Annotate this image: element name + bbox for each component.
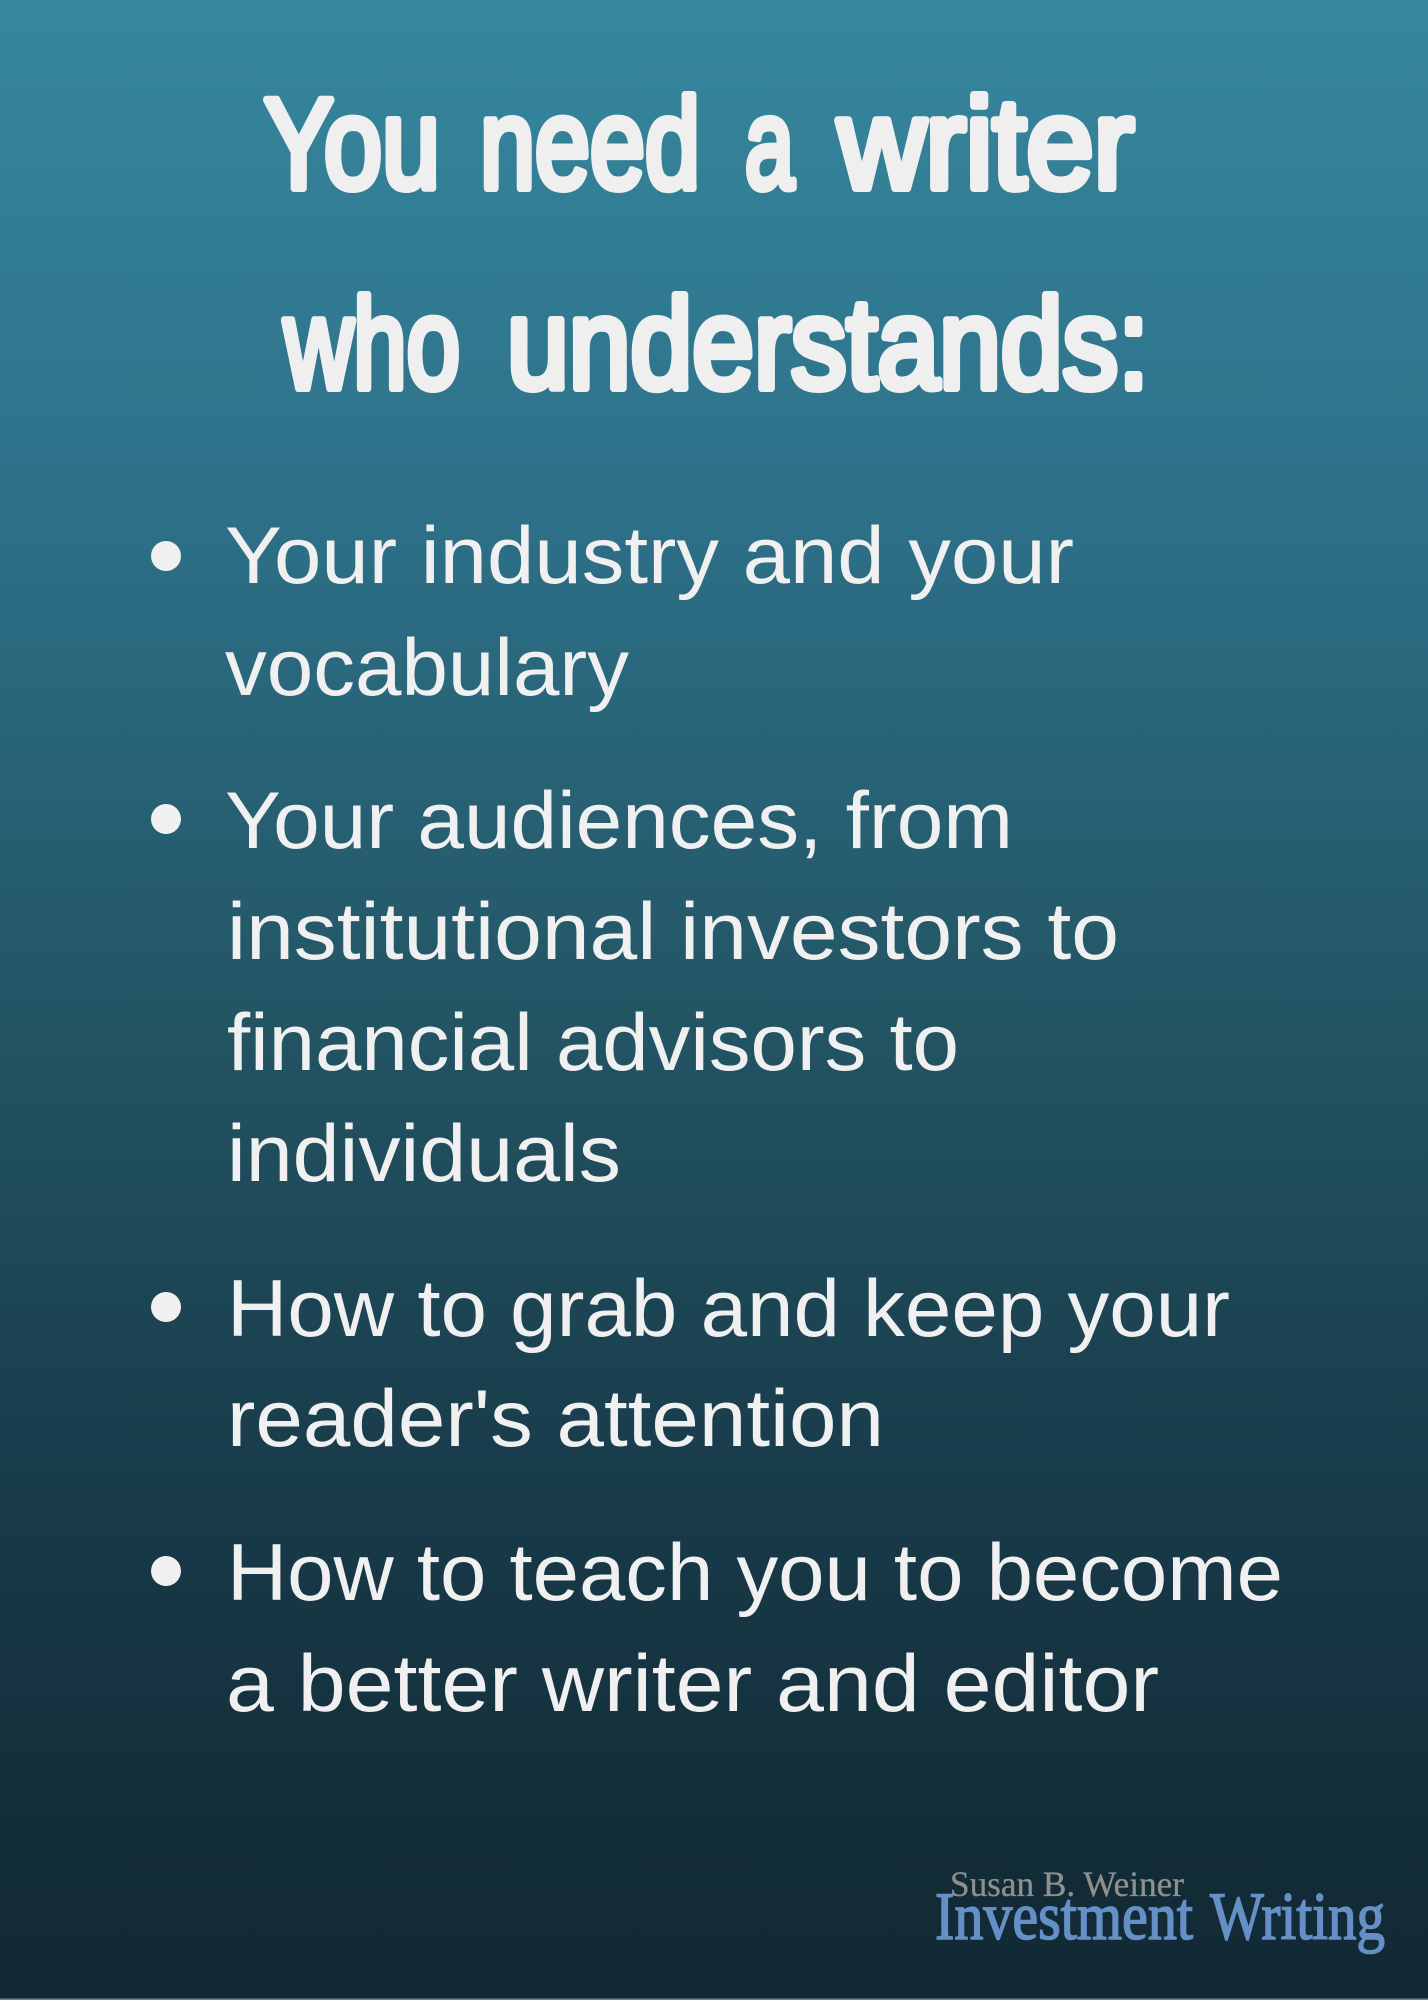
list item: attention: reader's attention <box>227 1374 884 1464</box>
title: understands: <box>507 273 1149 416</box>
list item: industry: vocabulary <box>225 623 630 713</box>
list item: audiences: individuals <box>227 1109 621 1199</box>
logo: Susan B. Weiner Investment Writing: Writing <box>1210 1878 1385 1954</box>
bottom edge line <box>0 1998 1428 2000</box>
title: a <box>745 73 795 216</box>
logo: Susan B. Weiner Investment Writing: Investment <box>935 1878 1193 1954</box>
logo: Susan B. Weiner Investment Writing: Susan B. Weiner <box>950 1864 1184 1904</box>
list item: audiences <box>151 776 1119 1199</box>
logo: Susan B. Weiner Investment Writing <box>935 1864 1385 1954</box>
list item: teaching: How to teach you to become <box>227 1528 1283 1618</box>
list item: audiences: institutional investors to <box>227 887 1119 977</box>
list item: teaching <box>151 1528 1283 1729</box>
list item: industry: Your industry and your <box>225 511 1074 601</box>
title: who <box>283 273 460 416</box>
title <box>264 73 1149 416</box>
bullet list <box>151 511 1283 1729</box>
title: writer <box>837 73 1134 216</box>
list item: audiences: financial advisors to <box>227 998 959 1088</box>
list item: attention: How to grab and keep your <box>227 1264 1230 1354</box>
title: need <box>480 73 700 216</box>
list item: industry <box>151 511 1074 713</box>
list item: teaching: a better writer and editor <box>226 1639 1159 1729</box>
list item: audiences: Your audiences, from <box>225 776 1013 866</box>
list item: attention <box>151 1264 1230 1464</box>
title: You <box>264 73 440 216</box>
